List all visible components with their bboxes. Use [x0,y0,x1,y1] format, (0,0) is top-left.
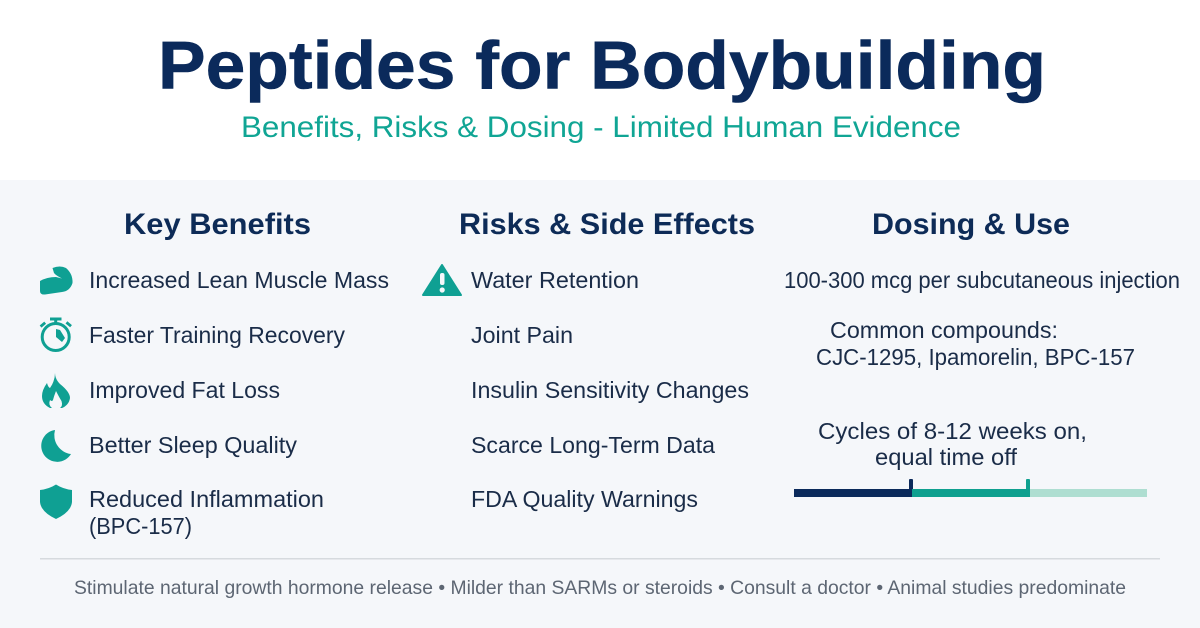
risk: joint pain: Joint Pain [471,322,573,348]
risk: long-term data: Scarce Long-Term Data [471,432,715,458]
icon: crescent moon [41,430,71,462]
panel: dosing [784,208,1180,497]
heading: key benefits: Key Benefits [124,208,311,241]
subtitle: Benefits, Risks & Dosing - Limited Human Evidence [241,111,961,144]
panel: key benefits [40,208,389,539]
footer note: Stimulate natural growth hormone release • Milder than SARMs or steroids • Consult a doctor • Animal studies predominate [74,577,1126,599]
risk: water retention: Water Retention [471,267,639,293]
benefit: inflammation: Reduced Inflammation [89,486,324,512]
risk: FDA: FDA Quality Warnings [471,486,698,512]
icon: flame [42,373,70,408]
cycle text line 1: Cycles of 8-12 weeks on, [818,418,1087,444]
benefit: lean muscle: Increased Lean Muscle Mass [89,267,389,293]
panel: risks [423,208,755,512]
benefit: sleep: Better Sleep Quality [89,432,297,458]
risk: insulin: Insulin Sensitivity Changes [471,377,749,403]
dose text: 100-300 mcg per subcutaneous injection [784,267,1180,293]
benefit: recovery: Faster Training Recovery [89,322,345,348]
compounds label: Common compounds: [830,317,1058,343]
icon: shield [40,484,72,519]
icon: stopwatch [40,318,72,350]
benefit: BPC-157 note: (BPC-157) [89,513,192,539]
title: Peptides for Bodybuilding [158,28,1046,104]
cycle text line 2: equal time off [875,444,1018,470]
compounds list: CJC-1295, Ipamorelin, BPC-157 [816,344,1135,370]
icon: warning triangle [423,265,461,295]
heading: dosing: Dosing & Use [872,208,1070,241]
icon: flexed arm [40,266,73,295]
content background panel [0,180,1200,628]
cycle timeline bar [794,479,1147,497]
heading: risks: Risks & Side Effects [459,208,755,241]
benefit: fat loss: Improved Fat Loss [89,377,280,403]
